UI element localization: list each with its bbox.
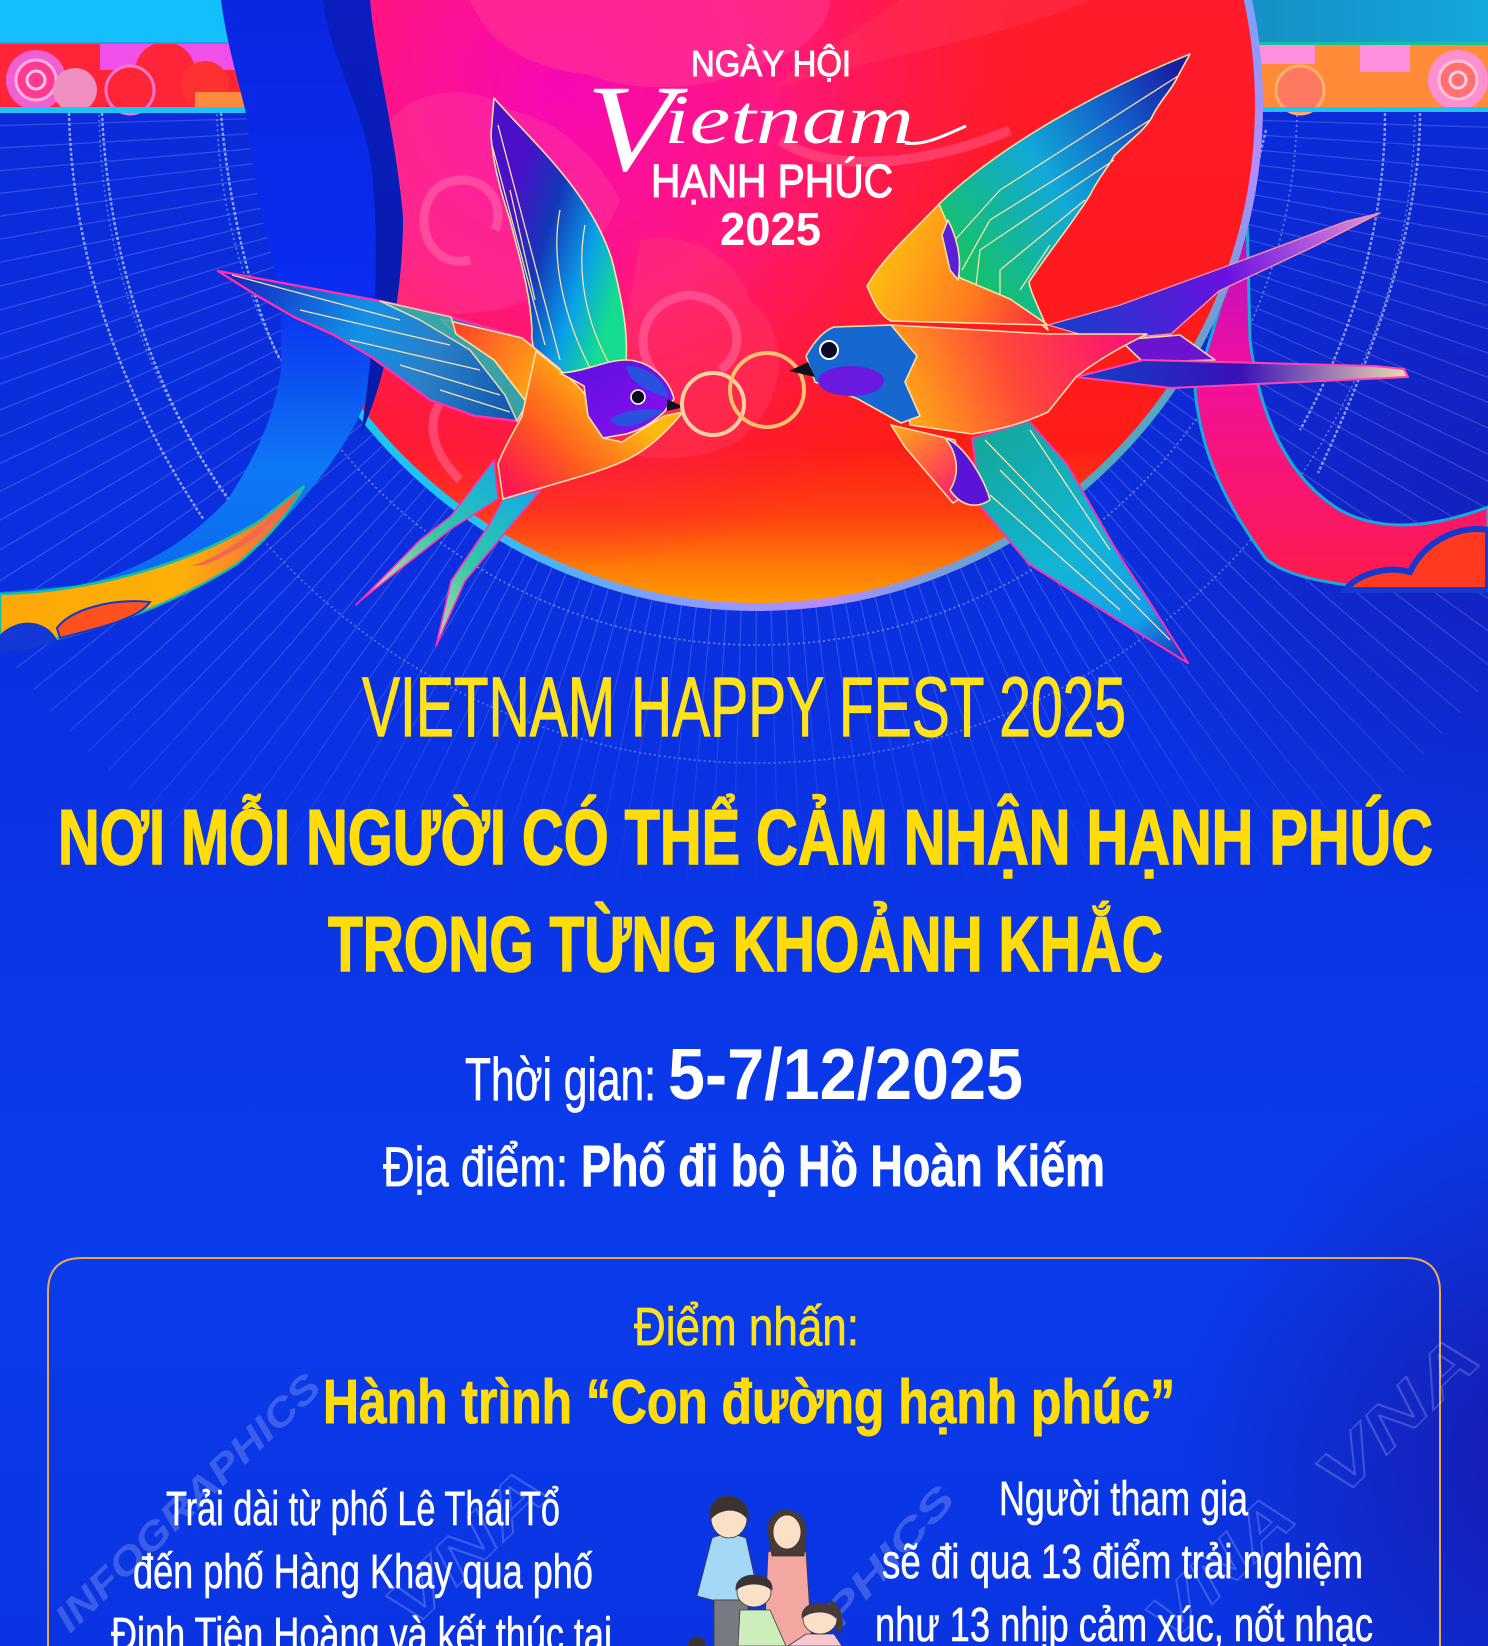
right description <box>875 1473 1373 1646</box>
upper wing <box>491 98 626 373</box>
watermarks: INFOGRAPHICS <box>47 1366 329 1640</box>
spread wing <box>218 271 560 421</box>
lower wing <box>891 421 1188 663</box>
right swallow <box>789 54 1408 663</box>
top left sky strip <box>0 0 235 44</box>
right pink ribbon <box>1195 217 1488 590</box>
father <box>697 1496 759 1646</box>
watermarks: PHICS <box>815 1478 964 1636</box>
event name: VIETNAM HAPPY FEST 2025 <box>362 660 1126 754</box>
wing shoulder <box>867 204 1048 325</box>
body <box>498 351 683 499</box>
event time <box>465 1035 1023 1115</box>
festival logo: ietnam <box>664 82 914 159</box>
moon clouds <box>383 0 1090 458</box>
wedding rings <box>682 353 804 435</box>
wing purple feathers <box>942 220 960 280</box>
festival logo: HẠNH PHÚC <box>651 155 893 207</box>
panel border <box>48 1258 1440 1646</box>
main heading <box>58 793 1433 988</box>
beak <box>789 362 815 377</box>
left description: đến phố Hàng Khay qua phố <box>133 1546 593 1599</box>
moon circle <box>255 0 1259 607</box>
left blue ribbon <box>0 0 403 651</box>
right description: Người tham gia <box>999 1473 1248 1526</box>
left swallow <box>218 98 684 646</box>
daughter <box>788 1600 842 1646</box>
toddler <box>688 1637 706 1646</box>
festival logo <box>586 43 966 255</box>
body <box>891 325 1147 434</box>
watermarks: VNA <box>1302 1322 1488 1510</box>
top right sky strip <box>1250 0 1488 44</box>
tail <box>356 460 541 646</box>
eye <box>820 341 838 359</box>
highlight panel <box>47 1258 1488 1646</box>
left description <box>111 1483 612 1646</box>
eye <box>631 390 645 404</box>
event time: 5-7/12/2025 <box>668 1035 1023 1115</box>
radial line pattern and dotted arcs <box>42 0 1472 820</box>
festival logo: V <box>586 60 688 197</box>
beak <box>667 399 684 411</box>
event location: Phố đi bộ Hồ Hoàn Kiếm <box>581 1134 1105 1199</box>
head <box>789 325 920 423</box>
festival logo: 2025 <box>720 203 821 255</box>
family illustration <box>688 1496 842 1646</box>
main heading: TRONG TỪNG KHOẢNH KHẮC <box>328 900 1163 988</box>
left description: Trải dài từ phố Lê Thái Tổ <box>166 1483 560 1536</box>
watermarks: VNA <box>372 1454 564 1642</box>
right cloud pattern band <box>1255 42 1488 114</box>
head <box>560 360 684 438</box>
event time: Thời gian: <box>465 1046 656 1113</box>
festival logo: NGÀY HỘI <box>691 43 851 84</box>
watermarks <box>47 1322 1488 1646</box>
event location: Địa điểm: <box>383 1135 568 1198</box>
son <box>736 1575 786 1646</box>
upper wing <box>934 54 1190 330</box>
event location <box>383 1134 1105 1199</box>
left cloud pattern band <box>0 42 247 114</box>
panel heading: Hành trình “Con đường hạnh phúc” <box>323 1368 1175 1437</box>
mother <box>764 1510 812 1646</box>
panel label: Điểm nhấn: <box>634 1297 859 1357</box>
tail feathers <box>1048 213 1408 388</box>
